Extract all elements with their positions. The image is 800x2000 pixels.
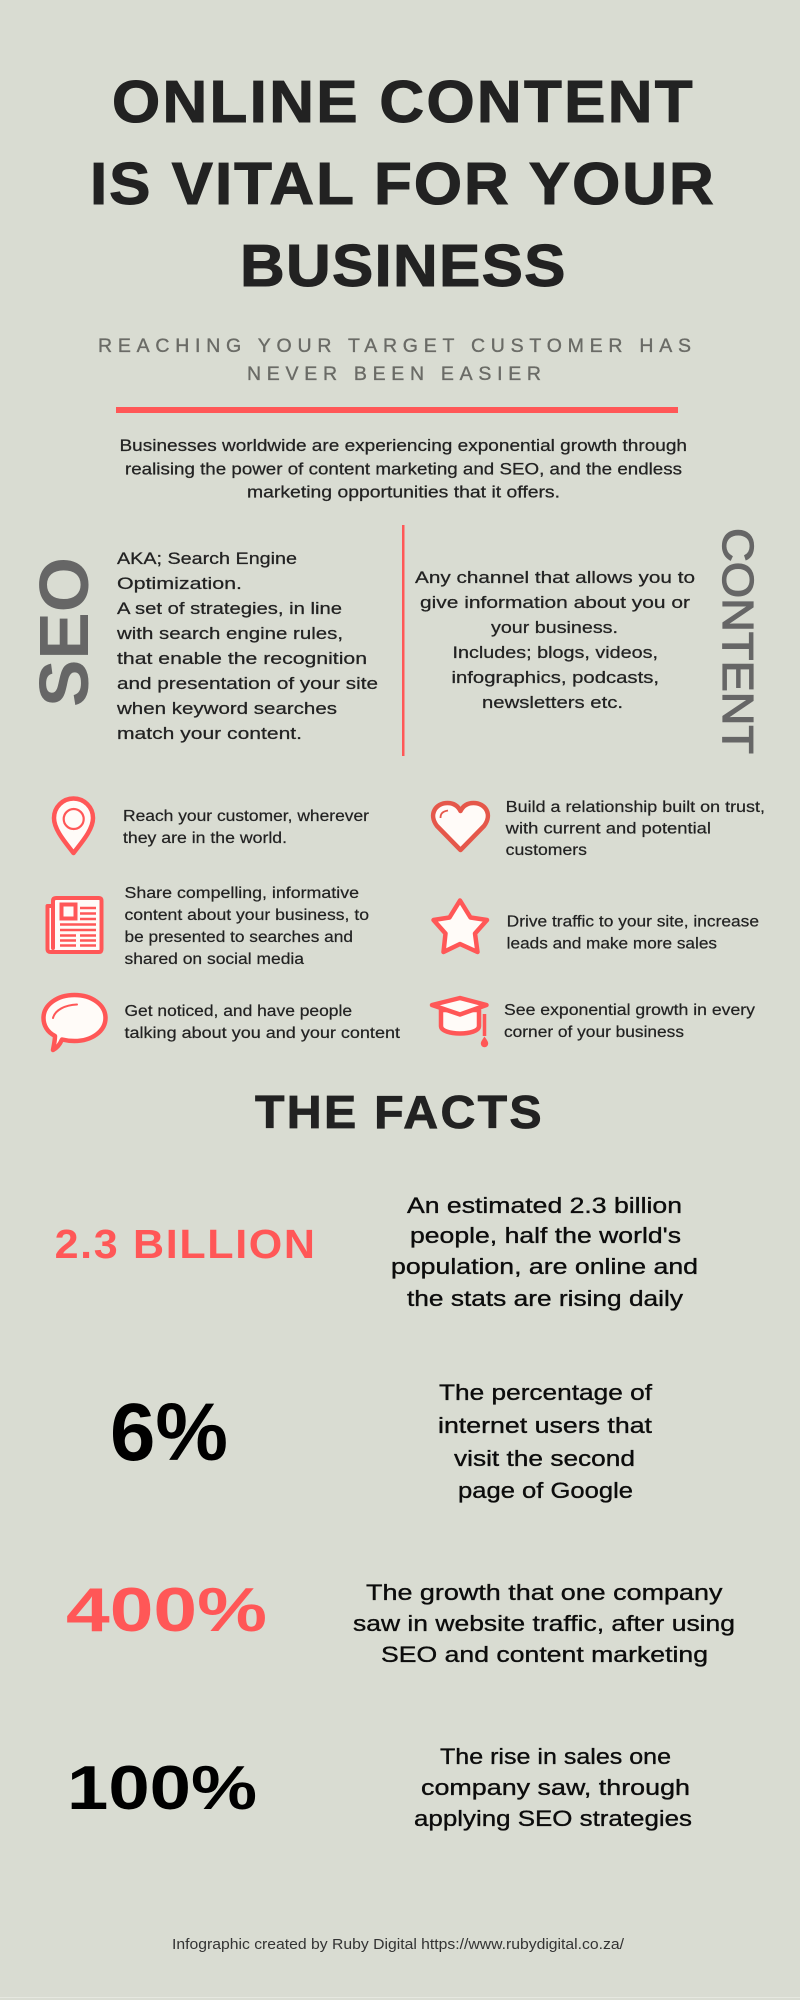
- stat text: 2.3 billion: people, half the world's: [410, 1223, 681, 1248]
- stat text: 6%: [438, 1380, 653, 1503]
- benefit text: relationship: Build a relationship built on trust,: [506, 799, 765, 816]
- title: BUSINESS: [240, 232, 565, 299]
- intro text: marketing opportunities that it offers.: [247, 482, 560, 502]
- content description: newsletters etc.: [482, 693, 623, 712]
- stat text: 400%: The growth that one company: [366, 1580, 723, 1605]
- benefit text: reach: [123, 808, 369, 847]
- footer credit: Infographic created by Ruby Digital https://www.rubydigital.co.za/: [172, 1936, 625, 1953]
- stat: 400%: 400%: [66, 1576, 267, 1645]
- benefit text: growth: [504, 1002, 755, 1041]
- subtitle: NEVER BEEN EASIER: [247, 363, 541, 385]
- SEO description: match your content.: [117, 724, 302, 743]
- stat text: 100%: applying SEO strategies: [414, 1806, 692, 1831]
- benefit text: traffic: [507, 914, 759, 952]
- content description: give information about you or: [420, 593, 690, 612]
- icon: heart: [433, 803, 488, 850]
- vertical divider: [402, 525, 404, 756]
- stat text: 400%: [353, 1580, 735, 1667]
- stat text: 100%: [414, 1744, 692, 1831]
- stat text: 400%: SEO and content marketing: [381, 1642, 708, 1667]
- stat text: 2.3 billion: An estimated 2.3 billion: [407, 1193, 682, 1218]
- title: IS VITAL FOR YOUR: [90, 150, 714, 217]
- benefit text: relationship: with current and potential: [505, 820, 711, 838]
- SEO rotated heading: SEO: [25, 557, 103, 707]
- intro text: [120, 436, 687, 502]
- SEO description: [116, 549, 378, 743]
- SEO description: and presentation of your site: [117, 674, 378, 693]
- benefit text: traffic: leads and make more sales: [507, 936, 717, 952]
- SEO description: A set of strategies, in line: [117, 599, 342, 618]
- benefit text: relationship: customers: [506, 842, 587, 859]
- stat text: 100%: company saw, through: [421, 1775, 690, 1800]
- SEO description: when keyword searches: [116, 699, 337, 718]
- stat text: 2.3 billion: [391, 1193, 698, 1311]
- benefit text: share: [124, 885, 369, 968]
- benefit text: relationship: [505, 799, 765, 859]
- benefit text: reach: they are in the world.: [123, 830, 287, 847]
- stat text: 100%: The rise in sales one: [440, 1744, 671, 1769]
- stat text: 6%: page of Google: [458, 1478, 633, 1503]
- stat: 2.3 billion: 2.3 BILLION: [55, 1221, 315, 1267]
- benefit text: traffic: Drive traffic to your site, increase: [507, 914, 759, 931]
- CONTENT rotated heading: CONTENT: [713, 528, 762, 754]
- stat text: 6%: visit the second: [454, 1446, 635, 1471]
- heading: the facts: THE FACTS: [255, 1086, 542, 1138]
- icon: speech bubble: [44, 995, 106, 1050]
- stat text: 6%: The percentage of: [439, 1380, 653, 1405]
- SEO description: that enable the recognition: [117, 649, 367, 668]
- subtitle: REACHING YOUR TARGET CUSTOMER HAS: [98, 335, 691, 357]
- title: [90, 68, 714, 299]
- SEO description: Optimization.: [117, 574, 242, 593]
- content description: infographics, podcasts,: [452, 668, 659, 687]
- stat text: 2.3 billion: population, are online and: [391, 1254, 698, 1279]
- intro text: realising the power of content marketing and SEO, and the endless: [125, 460, 682, 478]
- stat text: 6%: internet users that: [438, 1413, 653, 1438]
- benefit text: share: shared on social media: [124, 951, 304, 968]
- red divider bar: [116, 407, 678, 413]
- benefit text: reach: Reach your customer, wherever: [123, 808, 369, 825]
- benefit text: share: be presented to searches and: [124, 929, 353, 946]
- icon: graduation cap: [432, 998, 488, 1047]
- benefit text: growth: See exponential growth in every: [504, 1002, 755, 1019]
- benefit text: growth: corner of your business: [504, 1024, 684, 1041]
- subtitle: [98, 335, 691, 385]
- benefit text: share: content about your business, to: [124, 907, 369, 924]
- stat: 100%: 100%: [67, 1754, 257, 1823]
- SEO description: AKA; Search Engine: [117, 549, 297, 568]
- benefit text: noticed: talking about you and your content: [124, 1025, 401, 1042]
- content description: Any channel that allows you to: [415, 568, 695, 587]
- stat text: 400%: saw in website traffic, after using: [353, 1611, 735, 1636]
- content description: your business.: [491, 618, 618, 637]
- SEO description: with search engine rules,: [116, 624, 343, 643]
- icon: star: [434, 900, 487, 952]
- content description: [415, 568, 695, 712]
- content description: Includes; blogs, videos,: [452, 643, 658, 662]
- benefit text: noticed: [124, 1003, 401, 1042]
- intro text: Businesses worldwide are experiencing exponential growth through: [120, 436, 687, 455]
- title: ONLINE CONTENT: [112, 68, 693, 135]
- stat: 6%: 6%: [110, 1387, 228, 1478]
- icon: newspaper: [48, 898, 102, 952]
- stat text: 2.3 billion: the stats are rising daily: [407, 1286, 684, 1311]
- benefit text: share: Share compelling, informative: [124, 885, 359, 902]
- icon: location pin: [54, 798, 93, 853]
- benefit text: noticed: Get noticed, and have people: [124, 1003, 352, 1020]
